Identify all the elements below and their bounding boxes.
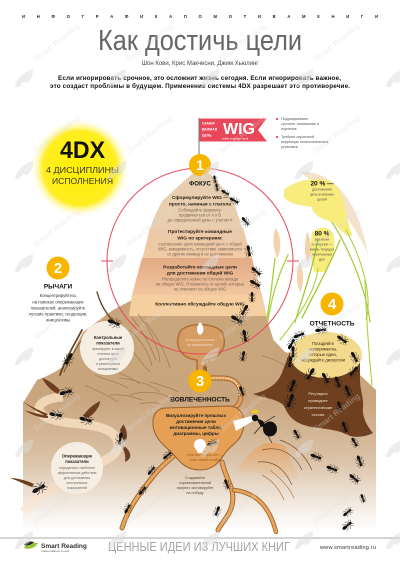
- step 2: levers: Концентрируйтесь: [40, 293, 77, 298]
- watermark: Smart Reading: [32, 484, 82, 526]
- authors: Шон Кови, Крис Макчесни, Джим Хьюлинг: [142, 61, 259, 67]
- callout: lead indicators: эффективные действия: [58, 471, 97, 475]
- stump: эксперименты,: [308, 346, 338, 352]
- callout: control indicators: достигнута: [99, 357, 117, 361]
- mound: для достижения общей WIG: [167, 270, 234, 276]
- mound: Соблюдайте формулу:: [178, 208, 222, 212]
- text: competition: эффект, мотивируйте: [177, 486, 213, 490]
- watermark: Smart Reading: [312, 392, 362, 434]
- watermark: Smart Reading: [312, 114, 362, 156]
- note: 80%: вихрь текущих: [310, 248, 334, 252]
- badge: 4DX: [30, 118, 130, 218]
- bullets: right of flag: коррекции психологических: [281, 140, 329, 144]
- text: competition: соревновательный: [179, 481, 211, 485]
- mound: Протестируйте командные: [168, 228, 232, 235]
- chamber: engagement: «Как мы ведем счет —: [187, 453, 224, 457]
- flag: WIG: ЦЕЛЬ: [202, 134, 212, 138]
- callout: control indicators: инициативы: [98, 367, 118, 371]
- flag: WIG: ВАЖНАЯ: [202, 128, 218, 132]
- stump: [253, 332, 373, 437]
- chamber: engagement: достижения цели: [176, 419, 216, 424]
- watermark: Smart Reading: [32, 22, 82, 64]
- watermark: Smart Reading: [218, 207, 268, 249]
- watermark: Smart Reading: [125, 207, 175, 249]
- note: 20%: 20 % —: [310, 180, 334, 188]
- watermark: Smart Reading: [218, 484, 268, 526]
- bullets: right of flag: изучение: [281, 127, 297, 131]
- callout: lead indicators: [51, 442, 103, 494]
- stump: обсуждайте дискуссии: [301, 358, 346, 362]
- title: Как достичь цели: [98, 25, 302, 57]
- watermark: Smart Reading: [125, 484, 175, 526]
- stump: сессии: [312, 412, 324, 417]
- text: competition: [177, 476, 213, 495]
- hay mound right: [238, 440, 312, 500]
- callout: control indicators: [80, 321, 134, 375]
- flag: WIG: САМАЯ: [202, 122, 215, 126]
- bullets: right of flag: установок: [281, 145, 298, 149]
- step 3: engagement: [170, 370, 230, 404]
- note: 80%: 80 %: [315, 230, 330, 238]
- watermark: Smart Reading: [125, 392, 175, 434]
- lead paragraph: Если игнорировать срочное, это осложнит жизнь сегодня. Если игнорировать важное,: [58, 75, 341, 82]
- step 2: levers: показателей, анализируйте: [31, 306, 86, 310]
- bullets: right of flag: [276, 117, 329, 149]
- chamber: engagement: диаграммы, цифры: [173, 430, 219, 436]
- callout: lead indicators: для достижения: [64, 476, 90, 480]
- callout: lead indicators: Опережающие: [62, 454, 93, 458]
- tunnel network: [23, 397, 118, 512]
- watermark: Smart Reading: [218, 300, 268, 342]
- callout: lead indicators: показатели: [65, 459, 89, 464]
- callout: lead indicators: показателей: [67, 486, 87, 490]
- note: 80%: [310, 230, 334, 262]
- watermark: Smart Reading: [218, 22, 268, 64]
- note: 20%: целей: [317, 198, 327, 202]
- icon: light bulb: [194, 439, 206, 453]
- footer tagline: ЦЕННЫЕ ИДЕИ ИЗ ЛУЧШИХ КНИГ: [108, 540, 290, 554]
- mound: Распределите нужно по степени вклада: [162, 276, 239, 282]
- ant with spotlight: [233, 409, 277, 443]
- step 1: focus: ФОКУС: [189, 182, 211, 188]
- mound: на общую WIG. Откажитесь от целей, которые: [156, 282, 245, 286]
- small chamber: [178, 322, 224, 372]
- watermark: Smart Reading: [32, 114, 82, 156]
- mound: от других команд в ее достижении: [167, 252, 233, 256]
- text: competition: Создавайте: [185, 476, 205, 480]
- flag: WIG: wildly important goal: [222, 136, 249, 140]
- straw on hills: [60, 292, 288, 404]
- step 1: focus: [189, 154, 211, 188]
- grass and plumes: [262, 172, 372, 385]
- mound: [122, 170, 275, 372]
- watermark: Smart Reading: [312, 484, 362, 526]
- earth: [23, 300, 376, 530]
- tunnels: roots: [122, 368, 276, 532]
- footer logo: Самое важное из книг: [41, 549, 70, 553]
- callout: control indicators: фиксируют, в какой: [92, 347, 124, 351]
- bullets: right of flag: Требуют серьезной: [281, 135, 314, 139]
- watermark: Smart Reading: [125, 22, 175, 64]
- callout: lead indicators: контрольных: [67, 481, 88, 485]
- watermark: Smart Reading: [32, 392, 82, 434]
- note: 80%: и энергии —: [312, 242, 333, 246]
- mound: WIG, измеримость, отсутствие зависимости: [158, 246, 242, 252]
- mound: продвинуться от А к В: [179, 212, 221, 218]
- note: 80%: неотложных: [312, 252, 332, 256]
- callout: control indicators: показатели: [96, 340, 120, 346]
- badge: 4DX: 4DX: [60, 137, 105, 164]
- step 2: levers: на поисках опережающих: [32, 300, 85, 304]
- footer logo: [24, 541, 87, 553]
- callout: control indicators: степени цель: [97, 352, 119, 356]
- badge: 4DX: ИСПОЛНЕНИЯ: [52, 177, 113, 186]
- step 4: accountability: 4: [328, 296, 337, 313]
- chamber: engagement: [122, 368, 276, 532]
- chamber: engagement: мотивационные табло,: [170, 424, 222, 430]
- flag: WIG: WIG: [223, 121, 255, 138]
- wings: [10, 378, 130, 487]
- note: 20%: достижение: [312, 188, 332, 192]
- top caption: И Н Ф О Г Р А Ф И К А П О М О Т И В А М К Н И Г И: [22, 14, 378, 19]
- step 2: levers: инициативы: [46, 318, 70, 322]
- ants: [30, 175, 368, 533]
- mound: WIG по критериям:: [177, 236, 223, 242]
- text: competition: на победу: [186, 491, 204, 495]
- callout: lead indicators: определяют наиболее: [59, 466, 95, 470]
- step 3: engagement: ВОВЛЕЧЕННОСТЬ: [170, 396, 230, 404]
- note: 80%: дел: [319, 258, 325, 262]
- mound: соотнесение цели командной цели с общей: [158, 242, 242, 246]
- mound: до определенной даты с учетом К: [168, 218, 233, 222]
- small chamber: на важнейшем»: [187, 343, 213, 347]
- stump: проводите: [308, 398, 328, 403]
- watermark: Smart Reading: [218, 114, 268, 156]
- step 2: levers: лучшие практики, тенденции,: [29, 312, 87, 316]
- lead paragraph: это создаст проблемы в будущем. Применение системы 4DX разрешает это противоречие.: [50, 82, 350, 90]
- step 4: accountability: ОТЧЕТНОСТЬ: [310, 320, 355, 328]
- note: 80%: времени: [315, 238, 329, 242]
- stump: Поощряйте: [312, 341, 335, 346]
- step 1: focus: 1: [196, 157, 204, 173]
- step 3: engagement: 3: [196, 373, 204, 390]
- watermark: Smart Reading: [218, 392, 268, 434]
- chamber: engagement: наш самый штаб»: [190, 458, 220, 462]
- watermark: Smart Reading: [32, 300, 82, 342]
- step 4: accountability: [310, 292, 355, 328]
- watermark: Smart Reading: [32, 207, 82, 249]
- small chamber: «Сосредоточьтесь: [185, 338, 215, 342]
- stump: Регулярно: [308, 391, 328, 396]
- badge: 4DX: 4 ДИСЦИПЛИНЫ: [46, 166, 119, 175]
- footer url: www.smartreading.ru: [319, 545, 376, 551]
- step 2: levers: РЫЧАГИ: [44, 284, 72, 290]
- mound: не отвечают на общую WIG: [174, 286, 226, 292]
- callout: control indicators: и реализуются: [96, 362, 120, 366]
- mound: Коллективно обсуждайте общую WIG: [155, 300, 245, 308]
- stump: которые идеи,: [309, 352, 337, 357]
- watermark: Smart Reading: [312, 300, 362, 342]
- stump: стратегические: [304, 405, 333, 410]
- chamber: engagement: Визуализируйте прошлых: [166, 412, 226, 418]
- mound: Сформулируйте WIG —: [172, 194, 228, 201]
- footer rule: [0, 538, 400, 539]
- note: 20%: [310, 180, 334, 202]
- bullets: right of flag: срочное, понимание и: [281, 122, 319, 126]
- note: 20%: цель в важных: [310, 192, 334, 196]
- mound: Разработайте командные цели: [163, 264, 237, 270]
- callout: control indicators: Контрольные: [94, 335, 123, 340]
- lead paragraph: [50, 75, 350, 90]
- mound: просто, начиная с глагола: [169, 202, 231, 208]
- bullets: right of flag: Подразумевают: [281, 117, 309, 121]
- watermark: Smart Reading: [125, 114, 175, 156]
- step 2: levers: 2: [54, 260, 62, 277]
- watermark: Smart Reading: [312, 207, 362, 249]
- watermark: Smart Reading: [125, 300, 175, 342]
- watermark: Smart Reading: [312, 22, 362, 64]
- footer logo: Smart Reading: [41, 543, 87, 550]
- step 2: levers: [29, 256, 87, 322]
- flag: WIG: [198, 118, 267, 156]
- focus circle outline: [101, 168, 299, 354]
